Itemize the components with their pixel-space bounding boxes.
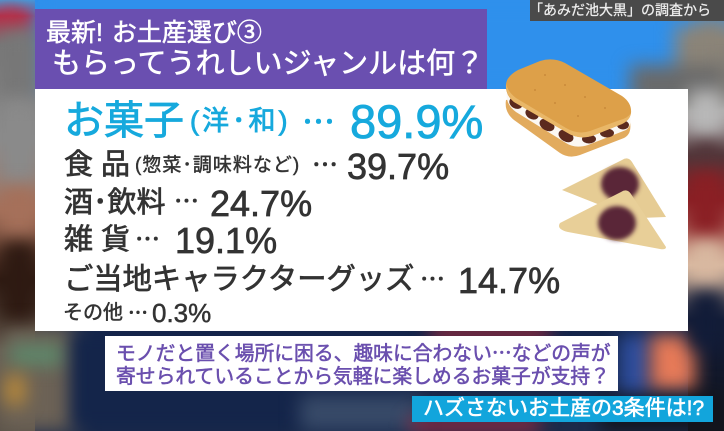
- result row: alcohol and drinks: 酒･飲料: [64, 187, 166, 219]
- result row: other: [63, 297, 211, 328]
- panel: purple heading: [35, 9, 487, 89]
- result row: food: [64, 145, 449, 187]
- result row: character goods: [64, 260, 560, 301]
- result row: character goods: ご当地キャラクターグッズ: [64, 263, 414, 296]
- heading line 1: 最新! お土産選び③: [46, 19, 262, 47]
- callout: explanation: 寄せられていることから気軽に楽しめるお菓子が支持？: [116, 366, 610, 388]
- result row: other: 0.3%: [152, 298, 211, 328]
- panel: white results: [35, 89, 688, 331]
- result row: goods: …: [135, 220, 160, 256]
- result row: sweets: [64, 95, 483, 148]
- result row: goods: 雑 貨: [64, 224, 130, 256]
- result row: character goods: 14.7%: [458, 260, 560, 301]
- icon: triangular sweets: [559, 158, 666, 250]
- result row: sweets: …: [302, 96, 335, 144]
- result row: sweets: お菓子: [64, 99, 184, 143]
- result row: other: …: [128, 297, 148, 326]
- callout: explanation: モノだと置く場所に困る、趣味に合わない…などの声が: [116, 337, 611, 366]
- result row: other: その他: [63, 302, 123, 324]
- callout: teaser: ハズさないお土産の3条件は!?: [423, 397, 704, 420]
- icon: sandwich cookie: [506, 59, 632, 157]
- result row: alcohol and drinks: …: [174, 182, 199, 218]
- result row: sweets: 89.9%: [350, 95, 483, 148]
- result row: food: 食 品: [64, 149, 130, 181]
- result row: goods: 19.1%: [175, 220, 277, 261]
- callout: explanation: [105, 336, 618, 391]
- heading line 2: もらってうれしいジャンルは何？: [52, 48, 484, 80]
- result row: food: 39.7%: [347, 146, 449, 187]
- result row: character goods: …: [420, 260, 445, 296]
- result row: alcohol and drinks: [64, 182, 312, 224]
- source tag: 「あみだ池大黒」の調査から: [529, 2, 711, 18]
- result row: sweets: (洋･和): [190, 106, 290, 136]
- result row: goods: [64, 220, 277, 261]
- result row: food: …: [312, 145, 338, 182]
- result row: food: (惣菜･調味料など): [135, 155, 300, 176]
- result row: alcohol and drinks: 24.7%: [210, 183, 312, 224]
